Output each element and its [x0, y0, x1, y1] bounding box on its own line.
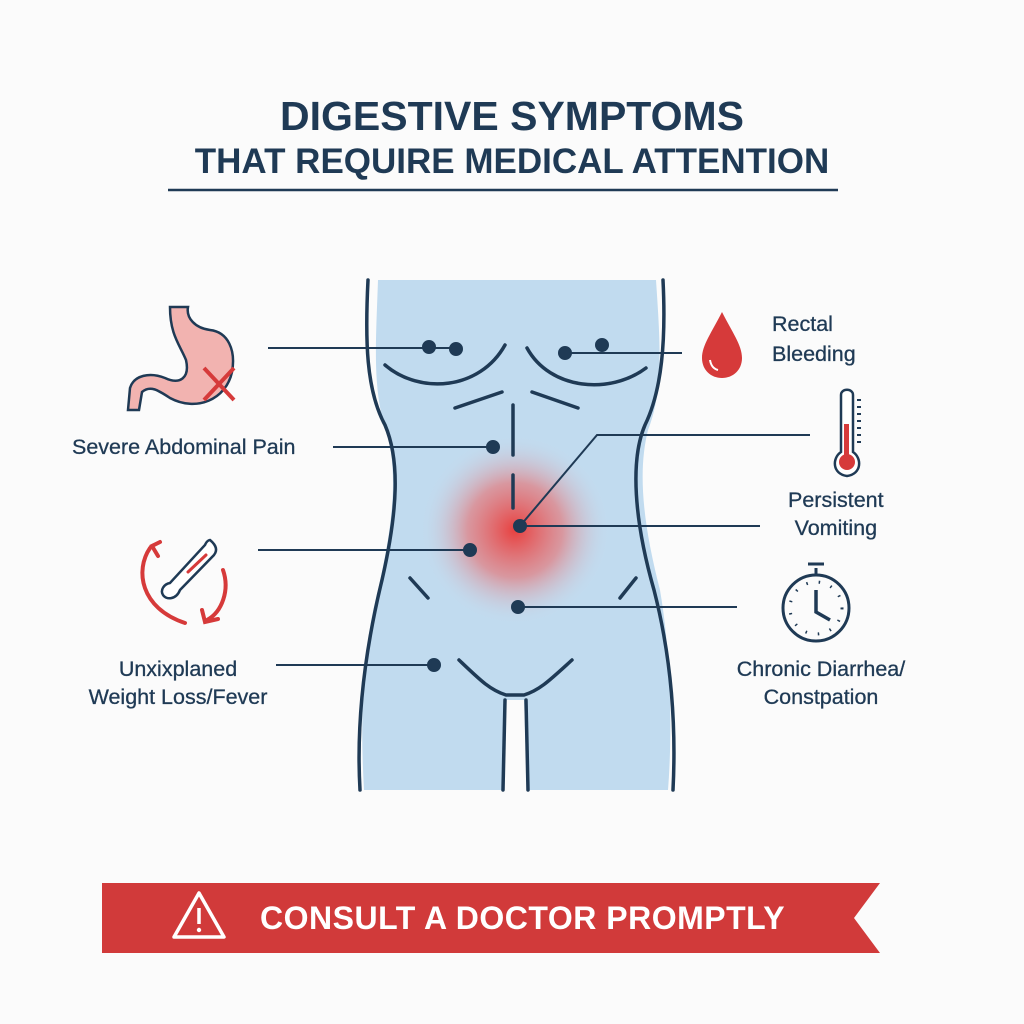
- label: rectal bleeding: Bleeding: [772, 342, 856, 366]
- label: chronic diarrhea: Chronic Diarrhea/: [737, 657, 905, 681]
- banner: consult a doctor: [102, 883, 880, 953]
- label: severe abdominal pain: Severe Abdominal Pain: [72, 435, 296, 459]
- icon: stomach: [128, 307, 234, 410]
- icon: thermometer: [835, 390, 861, 476]
- label: rectal bleeding: Rectal: [772, 312, 833, 336]
- icon: stopwatch: [783, 564, 849, 641]
- label: persistent vomiting: Vomiting: [795, 516, 877, 540]
- label: persistent vomiting: [788, 488, 884, 540]
- connector lines and dots: [258, 339, 810, 671]
- icon: thermometer with cycle arrows: [142, 540, 226, 623]
- title: [195, 93, 829, 181]
- label: weight loss/fever: Unxixplaned: [119, 657, 237, 681]
- banner: consult a doctor: CONSULT A DOCTOR PROMPTLY: [260, 900, 785, 936]
- title: THAT REQUIRE MEDICAL ATTENTION: [195, 142, 829, 181]
- label: persistent vomiting: Persistent: [788, 488, 884, 512]
- label: chronic diarrhea: Constpation: [764, 685, 878, 709]
- icon: blood drop: [702, 312, 742, 378]
- title: DIGESTIVE SYMPTOMS: [280, 93, 744, 139]
- label: weight loss/fever: Weight Loss/Fever: [89, 685, 267, 709]
- body torso: [359, 280, 674, 790]
- label: weight loss/fever: [88, 657, 268, 709]
- icon: warning: [174, 893, 224, 937]
- label: chronic diarrhea: [737, 657, 906, 709]
- label: rectal bleeding: [772, 312, 856, 366]
